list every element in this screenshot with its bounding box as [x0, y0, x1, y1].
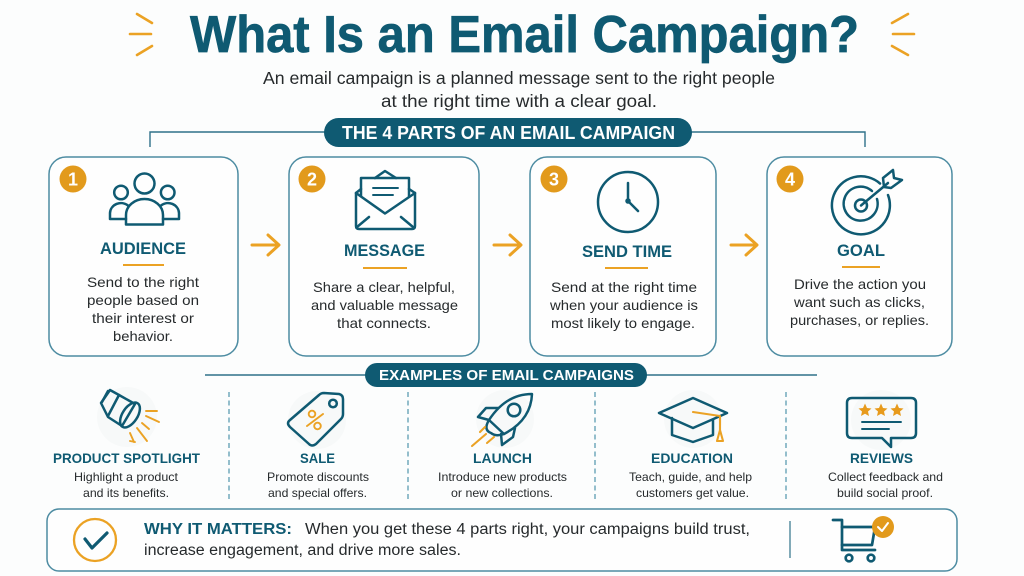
badge 1	[60, 166, 86, 192]
badge 2: 2	[307, 170, 317, 190]
text: goal description: purchases, or replies.	[790, 312, 929, 328]
example: sale	[267, 391, 369, 500]
example: launch	[438, 390, 567, 500]
heading: audience: AUDIENCE	[100, 240, 186, 258]
heading: sale: SALE	[300, 450, 335, 466]
text: audience description: behavior.	[113, 328, 173, 344]
text: why it matters: WHY IT MATTERS:	[144, 521, 292, 538]
text: sale description: Promote discounts	[267, 470, 369, 484]
text: launch description: or new collections.	[451, 486, 553, 500]
text: launch description: Introduce new products	[438, 470, 567, 484]
badge 2	[298, 166, 326, 192]
text: message description: Share a clear, helpful,	[313, 279, 455, 295]
heading: reviews: REVIEWS	[850, 450, 913, 466]
badge 3	[540, 166, 568, 192]
text: education description: Teach, guide, and help	[629, 470, 752, 484]
text: audience description: Send to the right	[87, 274, 199, 290]
arrow 1	[252, 235, 279, 255]
panel: send time	[530, 157, 716, 356]
example: reviews	[828, 390, 943, 500]
text: why it matters: increase engagement, and drive more sales.	[144, 542, 461, 559]
text: reviews description: build social proof.	[837, 486, 933, 500]
section header: the 4 parts	[150, 118, 865, 147]
text: education description: customers get value.	[636, 486, 749, 500]
heading: send time: SEND TIME	[582, 243, 672, 261]
subtitle	[263, 68, 775, 111]
text: message description	[311, 279, 458, 331]
example: education	[629, 390, 752, 500]
panel: message	[289, 157, 479, 356]
icon: audience	[110, 174, 179, 224]
text: audience description: their interest or	[92, 310, 194, 326]
text: goal description	[790, 276, 929, 328]
panel: why it matters	[47, 509, 957, 571]
icon: check circle	[74, 519, 116, 561]
text: education description	[629, 470, 752, 500]
icon: graduation cap	[659, 398, 727, 442]
heading: launch: LAUNCH	[473, 450, 532, 466]
section header: the 4 parts: THE 4 PARTS OF AN EMAIL CAMPAIGN	[342, 123, 675, 143]
icon: spotlight	[101, 390, 159, 442]
text: audience description	[87, 274, 199, 344]
text: reviews description: Collect feedback and	[828, 470, 943, 484]
icon: review bubble	[847, 398, 916, 447]
badge 3: 3	[549, 170, 559, 190]
text: goal description: want such as clicks,	[793, 294, 925, 310]
icon: rocket	[472, 394, 532, 446]
text: send time description: most likely to engage.	[551, 315, 695, 331]
icon: clock	[598, 172, 658, 232]
subtitle: An email campaign is a planned message sent to the right people	[263, 68, 775, 88]
heading: education: EDUCATION	[651, 450, 733, 466]
text: message description: that connects.	[337, 315, 431, 331]
text: reviews description	[828, 470, 943, 500]
badge 1: 1	[68, 170, 78, 190]
text: goal description: Drive the action you	[794, 276, 926, 292]
text: sale description	[267, 470, 369, 500]
icon: left sparkle marks	[130, 14, 152, 55]
icon: envelope	[356, 171, 415, 229]
text: send time description: when your audience is	[549, 297, 698, 313]
arrow 2	[494, 235, 521, 255]
example: product spotlight	[53, 387, 200, 500]
text: product spotlight description: and its benefits.	[83, 486, 169, 500]
text: send time description	[549, 279, 698, 331]
icon: right sparkle marks	[892, 14, 914, 55]
section header: examples: EXAMPLES OF EMAIL CAMPAIGNS	[379, 368, 634, 384]
text: send time description: Send at the right time	[551, 279, 697, 295]
heading: product spotlight: PRODUCT SPOTLIGHT	[53, 450, 200, 466]
heading: goal: GOAL	[837, 242, 885, 260]
text: message description: and valuable message	[311, 297, 458, 313]
subtitle: at the right time with a clear goal.	[381, 91, 657, 111]
text: why it matters: When you get these 4 parts right, your campaigns build trust,	[305, 521, 750, 538]
panel: audience	[49, 157, 238, 356]
badge 4: 4	[785, 170, 795, 190]
text: sale description: and special offers.	[268, 486, 367, 500]
arrow 3	[731, 235, 757, 255]
section header: examples	[205, 363, 817, 387]
text: audience description: people based on	[87, 292, 199, 308]
text: why it matters	[144, 521, 750, 559]
text: launch description	[438, 470, 567, 500]
icon: target	[832, 170, 902, 234]
text: product spotlight description	[74, 470, 179, 500]
heading: message: MESSAGE	[344, 242, 425, 260]
text: product spotlight description: Highlight a product	[74, 470, 179, 484]
title: What Is an Email Campaign?	[190, 5, 859, 63]
badge 4	[776, 166, 804, 192]
icon: shopping cart	[833, 516, 894, 561]
panel: goal	[767, 157, 952, 356]
icon: price tag	[288, 393, 343, 446]
